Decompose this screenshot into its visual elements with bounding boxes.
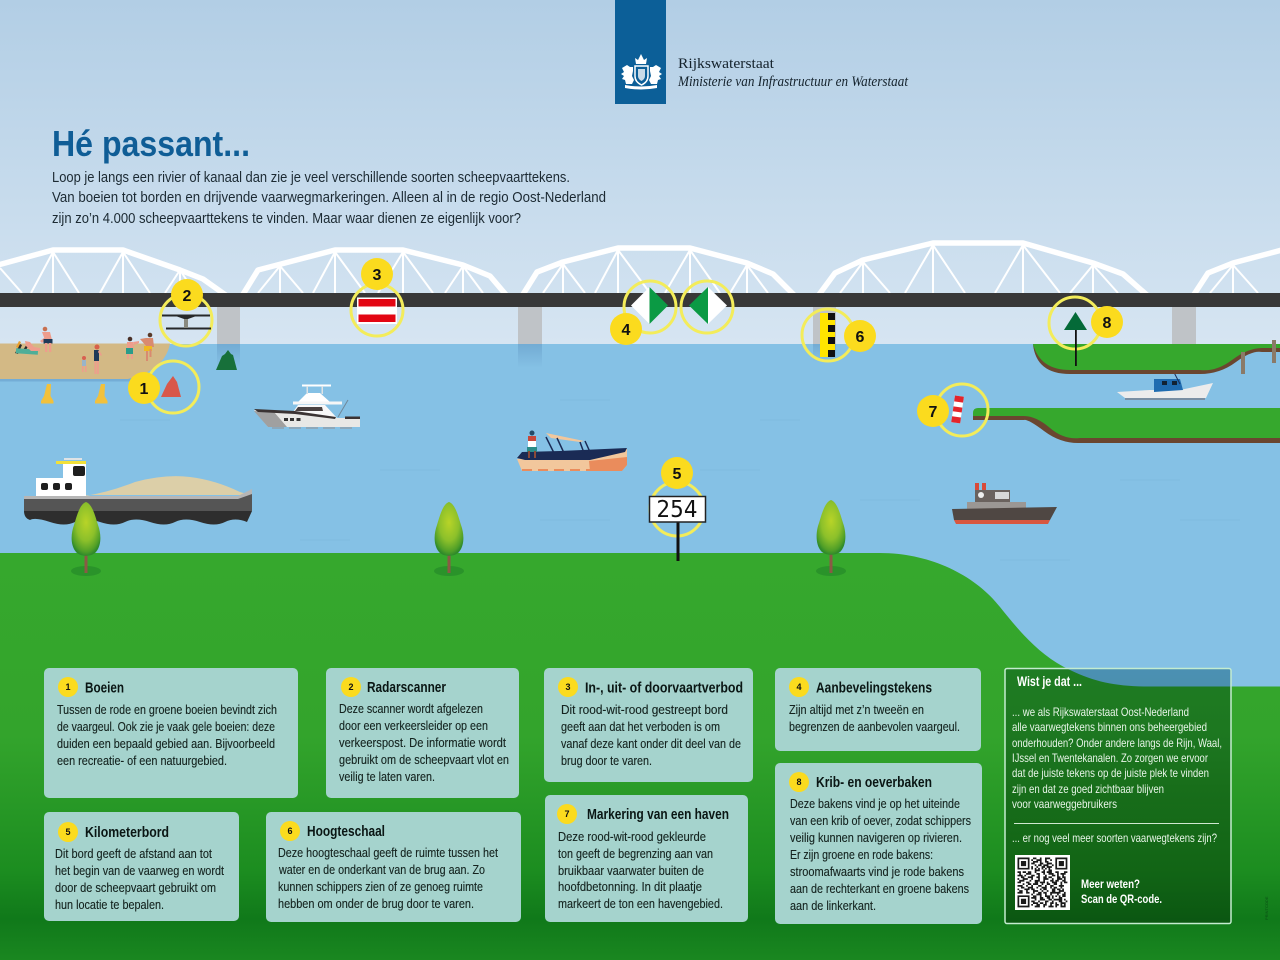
panel: Hoogteschaal: 6 <box>287 826 293 836</box>
marker 5: kilometre board <box>650 457 706 561</box>
intro text <box>52 170 606 227</box>
woman in swimsuit <box>94 344 102 374</box>
panel: Radarscanner: Deze scanner wordt afgelezen <box>339 702 483 716</box>
panel: Krib- en oeverbaken: aan de linkerkant. <box>790 899 876 913</box>
marker 7: harbour barrel: 7 <box>929 404 938 421</box>
panel: In-, uit- of doorvaartverbod: 3 <box>565 682 571 692</box>
panel body: ... we als Rijkswaterstaat Oost-Nederland <box>1012 705 1189 719</box>
panel: Markering van een haven: Markering van een haven <box>587 807 729 823</box>
marker 8: bank beacon <box>1049 297 1123 366</box>
panel: Markering van een haven: ton geeft de begrenzing aan van <box>558 847 713 861</box>
panel: In-, uit- of doorvaartverbod: In-, uit- of doorvaartverbod <box>585 680 743 696</box>
tug boat <box>952 483 1057 524</box>
panel: Krib- en oeverbaken: Krib- en oeverbaken <box>816 775 932 791</box>
panel body: IJssel en Twentekanalen. Zo zorgen we ervoor <box>1012 751 1208 765</box>
panel: Krib- en oeverbaken: Er zijn groene en rode bakens: <box>790 848 933 862</box>
panel: Krib- en oeverbaken: van een krib of oever, zodat schippers <box>790 814 971 828</box>
tree 2 <box>434 502 464 576</box>
panel: Radarscanner <box>326 668 519 798</box>
panel: Boeien: 1 <box>65 682 71 692</box>
panel: Krib- en oeverbaken: 8 <box>796 777 802 787</box>
yacht <box>254 384 360 428</box>
marker 1: buoy highlight: 1 <box>140 381 149 398</box>
panel: Kilometerbord: het begin van de vaarweg en wordt <box>55 864 224 878</box>
panel: Radarscanner: verkeerspost. De informatie wordt <box>339 736 506 750</box>
pillar reflections <box>217 344 836 368</box>
QR call to action: Meer weten? <box>1081 877 1140 891</box>
panel: In-, uit- of doorvaartverbod: geeft aan dat het verboden is om <box>561 720 720 734</box>
panel: Hoogteschaal: Hoogteschaal <box>307 824 385 840</box>
panel: Boeien: Tussen de rode en groene boeien bevindt zich <box>57 703 277 717</box>
panel: Aanbevelingstekens: Aanbevelingstekens <box>816 680 932 696</box>
cargo barge <box>24 458 252 524</box>
logo: Rijkswaterstaat <box>615 0 909 104</box>
panel: Boeien: een recreatie- of een natuurgebied. <box>57 754 227 768</box>
standing man <box>40 327 52 352</box>
ministry subtitle: Ministerie van Infrastructuur en Waterstaat <box>677 74 909 90</box>
panel: Markering van een haven: 7 <box>564 809 570 819</box>
marker 5: kilometre board: 254 <box>656 497 698 523</box>
jetty lower right <box>973 408 1280 443</box>
QR call to action <box>1081 877 1162 906</box>
panel: Kilometerbord: hun locatie te bepalen. <box>55 898 164 912</box>
green buoy <box>216 350 237 370</box>
marker 8: bank beacon: 8 <box>1103 315 1112 332</box>
print code: PRINTCODE <box>1264 896 1269 920</box>
panel: Markering van een haven: hoofdbetonning. In dit plaatje <box>558 880 702 894</box>
title: Hé passant... <box>52 123 250 164</box>
panel: Markering van een haven: bruikbaar vaarwater buiten de <box>558 864 704 878</box>
panel: Markering van een haven <box>545 795 748 922</box>
panel: Aanbevelingstekens: begrenzen de aanbevolen vaargeul. <box>789 720 960 734</box>
beach <box>0 344 170 382</box>
child <box>82 356 86 372</box>
tree 3 <box>816 500 846 576</box>
panel: Wist je dat <box>1005 668 1231 924</box>
panel body: voor vaarweggebruikers <box>1012 797 1117 811</box>
bridge <box>0 243 1280 368</box>
panel body: dat de juiste tekens op de juiste plek te vinden <box>1012 766 1209 780</box>
marker 2: radar scanner <box>160 279 212 346</box>
red buoy <box>161 376 181 397</box>
panel: Krib- en oeverbaken: Deze bakens vind je op het uiteinde <box>790 797 960 811</box>
jetty upper right <box>1033 340 1280 374</box>
panel: Boeien: duiden een bepaald gebied aan. Bijvoorbeeld <box>57 737 275 751</box>
marker 2: radar scanner: 2 <box>183 288 192 305</box>
tree 1 <box>71 502 101 576</box>
panel body: ... er nog veel meer soorten vaarwegtekens zijn? <box>1012 831 1217 845</box>
marker 4: recommendation signs <box>610 281 733 345</box>
QR call to action: Scan de QR-code. <box>1081 892 1162 906</box>
sunbathers <box>15 341 40 355</box>
panel: Hoogteschaal: hebben om onder de brug door te varen. <box>278 897 474 911</box>
marker 6: height scale <box>802 309 876 361</box>
boat with person <box>517 430 627 471</box>
marker 3: passage prohibited sign <box>351 258 403 336</box>
panel: Krib- en oeverbaken: stroomafwaarts vind je rode bakens <box>790 865 964 879</box>
panel: Krib- en oeverbaken <box>775 763 982 924</box>
panel: Radarscanner: door een verkeersleider op een <box>339 719 488 733</box>
panel: Hoogteschaal: Deze hoogteschaal geeft de ruimte tussen het <box>278 846 498 860</box>
panel body <box>1012 705 1222 845</box>
panel: Boeien: Boeien <box>85 680 124 696</box>
marker 6: height scale: 6 <box>856 329 865 346</box>
panel: In-, uit- of doorvaartverbod: vanaf deze kant onder dit deel van de <box>561 737 741 751</box>
panel: Krib- en oeverbaken: veilig kunnen navigeren op rivieren. <box>790 831 962 845</box>
panel: Kilometerbord: door de scheepvaart gebruikt om <box>55 881 216 895</box>
bridge deck <box>0 293 1280 307</box>
panel: Markering van een haven: Deze rood-wit-rood gekleurde <box>558 830 706 844</box>
panel: Radarscanner: veilig te laten varen. <box>339 770 435 784</box>
panel: Boeien: de vaargeul. Ook zie je vaak gele boeien: deze <box>57 720 275 734</box>
intro text: Loop je langs een rivier of kanaal dan zie je veel verschillende soorten scheepvaarttekens. <box>52 170 570 186</box>
ministry name: Rijkswaterstaat <box>678 56 774 72</box>
panel: Hoogteschaal: water en de onderkant van de brug aan. Zo <box>278 863 485 877</box>
intro text: Van boeien tot borden en drijvende vaarwegmarkeringen. Alleen al in de regio Oost-Nederland <box>52 190 606 206</box>
panel body: alle vaarwegtekens binnen ons beheergebied <box>1012 720 1207 734</box>
panel: Aanbevelingstekens <box>775 668 981 751</box>
logo ribbon <box>615 0 666 104</box>
panel: In-, uit- of doorvaartverbod <box>544 668 753 782</box>
panel body: onderhouden? Onder andere langs de Rijn, Waal, <box>1012 736 1222 750</box>
panel: Hoogteschaal: kunnen schippers zien of ze genoeg ruimte <box>278 880 483 894</box>
panel: Krib- en oeverbaken: aan de rechterkant en groene bakens <box>790 882 969 896</box>
person in green shorts <box>126 337 139 359</box>
trees <box>71 500 846 576</box>
panel: Radarscanner: gebruikt om de scheepvaart vlot en <box>339 753 509 767</box>
coat of arms <box>621 54 662 90</box>
marker 1: buoy highlight <box>128 361 199 413</box>
beach people <box>15 327 154 374</box>
panel: In-, uit- of doorvaartverbod: Dit rood-wit-rood gestreept bord <box>561 703 728 717</box>
marker 7: harbour barrel <box>917 384 988 436</box>
panel: Radarscanner: Radarscanner <box>367 680 446 696</box>
marker 4: recommendation signs: 4 <box>622 322 631 339</box>
panel heading: Wist je dat ... <box>1017 673 1082 689</box>
panel: Radarscanner: 2 <box>348 682 354 692</box>
intro text: zijn zo’n 4.000 scheepvaarttekens te vinden. Maar waar dienen ze eigenlijk voor? <box>52 211 521 227</box>
panel: Kilometerbord <box>44 812 239 921</box>
panel: Kilometerbord: 5 <box>65 827 71 837</box>
grass foreground <box>0 553 1280 960</box>
bridge pillars <box>217 307 1196 344</box>
blue boat <box>1117 355 1213 400</box>
bridge truss <box>0 243 1280 296</box>
sky background <box>0 0 1280 344</box>
marker 3: passage prohibited sign: 3 <box>373 267 382 284</box>
marker 5: kilometre board: 5 <box>673 466 682 483</box>
panel: Aanbevelingstekens: Zijn altijd met z’n tweeën en <box>789 703 924 717</box>
yellow buoys <box>41 384 108 404</box>
panel: Kilometerbord: Dit bord geeft de afstand aan tot <box>55 847 212 861</box>
river water <box>0 344 1280 689</box>
panel: Aanbevelingstekens: 4 <box>796 682 802 692</box>
panel body: zijn en dat ze goed zichtbaar blijven <box>1012 782 1164 796</box>
QR code <box>1015 855 1070 910</box>
man in yellow shorts <box>140 333 154 361</box>
panel: Kilometerbord: Kilometerbord <box>85 825 169 841</box>
panel: Boeien <box>44 668 298 798</box>
panel: In-, uit- of doorvaartverbod: brug door te varen. <box>561 754 652 768</box>
panel: Hoogteschaal <box>266 812 521 922</box>
panel: Markering van een haven: markeert de ton een havengebied. <box>558 897 723 911</box>
